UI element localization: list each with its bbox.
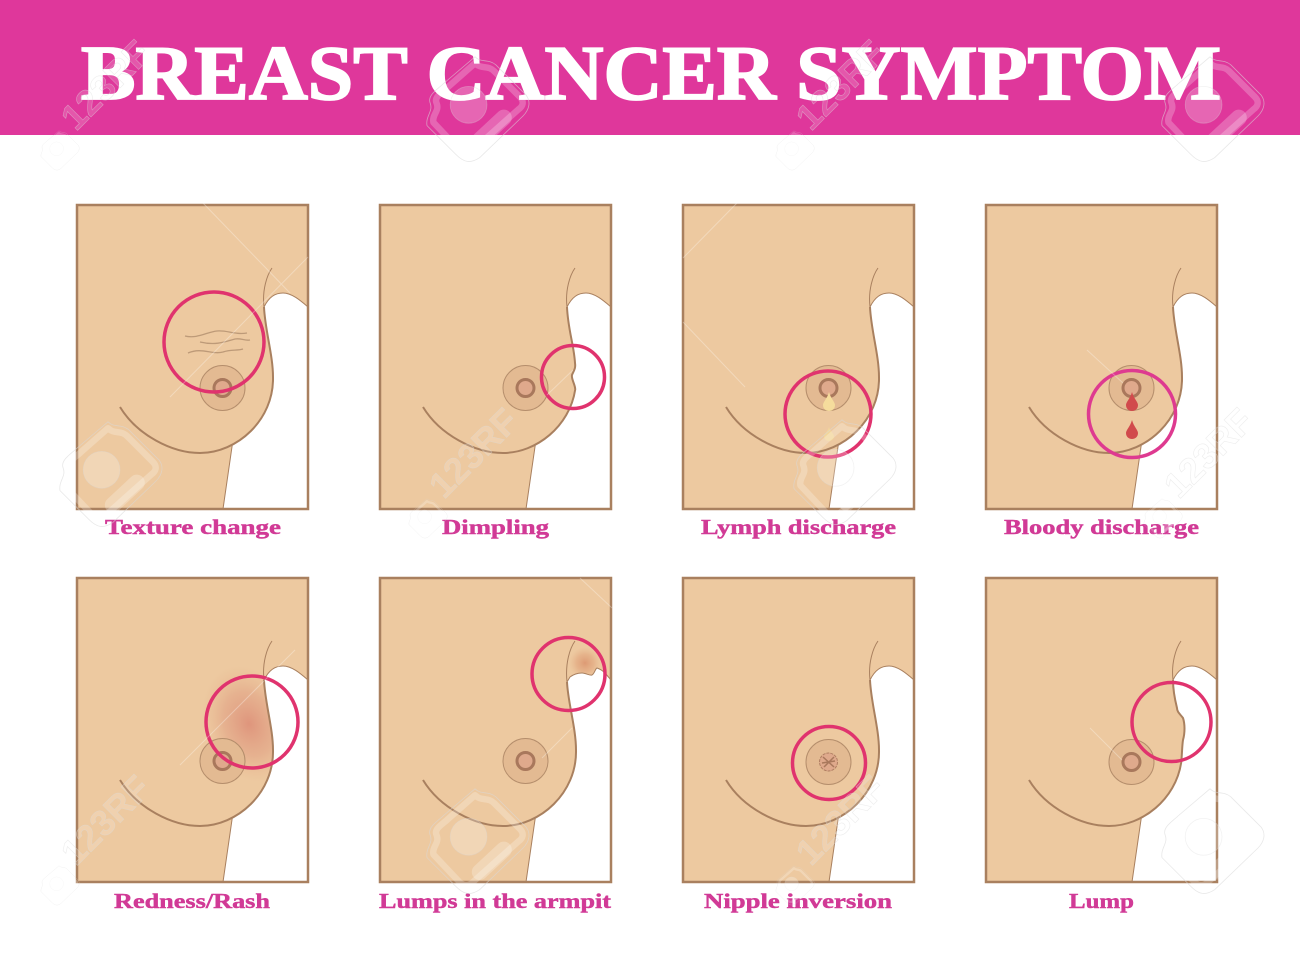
areola and nipple [1109,366,1154,410]
areola and nipple [503,366,548,410]
stock watermarks: 123RF [421,400,526,506]
stock watermarks: 123RF [788,32,893,138]
stock watermarks: 123RF [788,767,893,873]
highlight circle [164,292,264,392]
label: lymph discharge: Lymph discharge [701,515,896,539]
stock watermarks: 123RF [53,32,158,138]
panel: nipple inversion [683,578,914,882]
areola and nipple [806,366,851,410]
blood drops [1126,392,1138,439]
label: lump: Lump [1069,889,1134,913]
panel: lumps in the armpit [380,578,611,882]
rash [186,652,312,796]
stock watermarks: 123RF [53,767,158,873]
panel: lymph discharge [683,205,914,509]
highlight circle [1132,682,1211,762]
inverted nipple [806,740,851,784]
panel: redness/rash [77,578,312,882]
title banner [0,0,1300,135]
stock watermarks: 123RF [1156,400,1261,506]
highlight circle [532,638,605,710]
label: texture change: Texture change [105,515,281,539]
label: dimpling: Dimpling [442,515,550,539]
panel: dimpling [380,205,611,509]
wrinkles [185,331,250,353]
panel: lump [986,578,1217,882]
label: lumps in the armpit: Lumps in the armpit [379,889,611,913]
areola and nipple [503,738,548,784]
highlight circle [542,346,604,408]
areola and nipple [200,366,245,410]
panel: bloody discharge [986,205,1217,509]
armpit lump [569,647,601,679]
areola and nipple [1109,740,1154,784]
label: redness/rash: Redness/Rash [114,889,270,913]
highlight circle [1088,370,1176,458]
areola and nipple [200,738,245,784]
highlight circle [792,726,866,800]
highlight circle [206,676,298,768]
highlight circle [785,371,871,457]
lymph drops [823,392,835,441]
label: nipple inversion: Nipple inversion [704,889,892,913]
label: bloody discharge: Bloody discharge [1004,515,1199,539]
panel: texture change [77,205,308,509]
title: BREAST CANCER SYMPTOM [81,30,1221,116]
